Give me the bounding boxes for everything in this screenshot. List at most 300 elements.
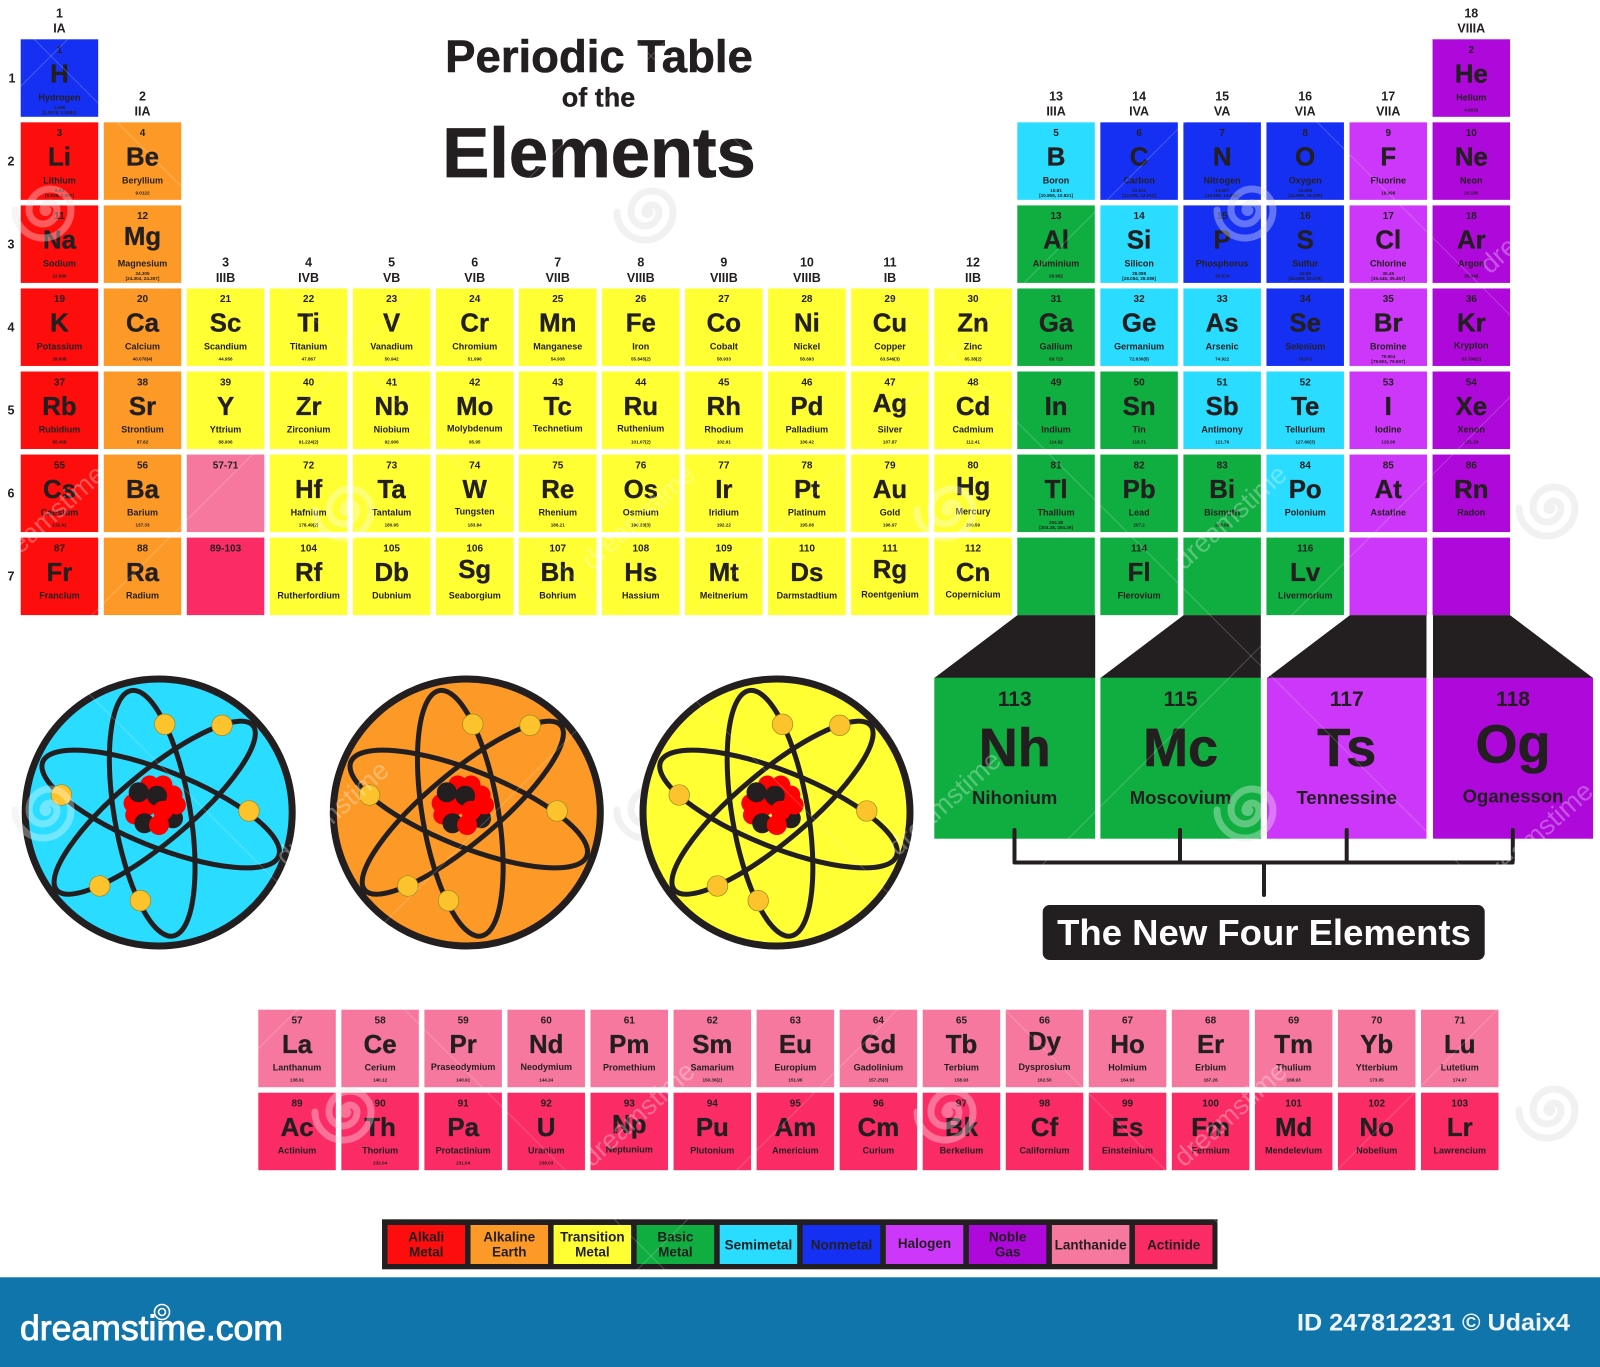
- cell: Md: Mendelevium: [1265, 1146, 1322, 1156]
- cell: Mg: 12: [137, 211, 148, 222]
- cell: Sb: Antimony: [1201, 424, 1243, 434]
- group labels: 9: [720, 256, 727, 270]
- cell: Ds: Darmstadtium: [777, 591, 837, 601]
- cell: He: He: [1455, 61, 1488, 89]
- cell: Rf: Rf: [295, 559, 323, 587]
- cell: Ce: Cerium: [365, 1063, 396, 1073]
- cell: Sg: Sg: [458, 556, 491, 584]
- cell: Ni: 58.693: [800, 356, 814, 361]
- cell: He: Helium: [1456, 92, 1486, 102]
- cell: Al: [1017, 205, 1095, 283]
- cell: Hf: Hafnium: [291, 508, 327, 518]
- cell: Eu: [757, 1010, 834, 1087]
- cell: As: As: [1206, 310, 1239, 338]
- cell: Lr: [1421, 1093, 1498, 1170]
- cell: Ta: 180.95: [385, 523, 399, 528]
- cell: Bh: Bh: [541, 559, 575, 587]
- callout: The New Four Elements: The New Four Elements: [1057, 912, 1471, 953]
- cell: I: [1350, 372, 1427, 449]
- cell: Si: Silicon: [1124, 258, 1154, 268]
- group labels: VIIA: [1376, 105, 1400, 119]
- cell: Fm: 100: [1202, 1098, 1219, 1109]
- cell: Se: Selenium: [1285, 341, 1325, 351]
- cell: Rg: [851, 538, 929, 615]
- cell: La: 57: [291, 1016, 303, 1027]
- cell: Os: Os: [624, 476, 658, 504]
- cell: Au: Au: [873, 476, 907, 504]
- cell: Sn: [1100, 372, 1178, 449]
- cell: Ar: 18: [1466, 211, 1477, 222]
- cell: Bi: [1183, 455, 1261, 532]
- cell: Lu: [1421, 1010, 1498, 1087]
- cell: Rh: Rh: [707, 393, 741, 421]
- cell: Pu: 94: [707, 1098, 718, 1109]
- cell: At: Astatine: [1370, 508, 1406, 518]
- legend: Basic Metal: [637, 1225, 714, 1264]
- cell: Mg: Magnesium: [118, 258, 167, 268]
- cell: Zn: 65.38(2): [964, 356, 982, 361]
- cell: Fe: 55.845(2): [631, 356, 651, 361]
- cell: Fe: 26: [635, 294, 647, 305]
- legend: Lanthanide: Lanthanide: [1055, 1237, 1127, 1252]
- cell: Os: 190.23(3): [631, 523, 651, 528]
- group labels: IB: [884, 271, 896, 285]
- cell: Pt: 195.08: [800, 523, 814, 528]
- cell: La: 138.91: [290, 1078, 305, 1083]
- cell: Yb: [1338, 1010, 1415, 1087]
- cell: Fm: [1172, 1093, 1249, 1170]
- cell: Sb: 51: [1217, 377, 1228, 388]
- cell: No: 102: [1368, 1098, 1385, 1109]
- cell: Mn: Mn: [539, 310, 576, 338]
- cell: Lu: 174.97: [1453, 1078, 1467, 1083]
- cell: Pm: Promethium: [603, 1063, 656, 1073]
- cell: Se: 78.971: [1298, 356, 1313, 361]
- cell: Md: 101: [1285, 1098, 1302, 1109]
- cell: Pu: [674, 1093, 751, 1170]
- cell: Ru: Ru: [624, 393, 658, 421]
- cell: Si: [1100, 205, 1178, 283]
- cell: Bk: Berkelium: [940, 1146, 983, 1156]
- cell: Lv: [1266, 538, 1344, 615]
- cell: lanthanide placeholder: 57-71: [213, 460, 239, 471]
- cell: N: 14.007: [1215, 188, 1230, 193]
- cell: Cl: [1350, 205, 1427, 283]
- cell: Rh: 45: [718, 377, 730, 388]
- cell: Db: [353, 538, 430, 615]
- cell: Sr: 38: [137, 377, 148, 388]
- cell: Cr: [436, 288, 513, 366]
- group labels: 5: [388, 256, 395, 270]
- cell: Cu: [851, 288, 929, 366]
- cell: Pm: Pm: [609, 1031, 649, 1059]
- cell: N: [14.006, 14.008]: [1205, 193, 1239, 198]
- periodic table main grid: [21, 39, 1510, 615]
- cell: Mo: 42: [469, 377, 481, 388]
- cell: Si: [28.084, 28.086]: [1122, 276, 1156, 281]
- group labels: IIB: [965, 271, 981, 285]
- cell: Cf: 98: [1039, 1098, 1050, 1109]
- cell: Am: 95: [790, 1098, 801, 1109]
- cell: Rh: [685, 372, 763, 449]
- cell: At: [1350, 455, 1427, 532]
- cell: Sb: 121.76: [1215, 440, 1230, 444]
- group labels: IVA: [1129, 105, 1149, 119]
- cell: Ce: 58: [375, 1016, 386, 1027]
- cell: N: Nitrogen: [1204, 175, 1241, 185]
- cell: Tb: Tb: [946, 1031, 977, 1059]
- cell: O: [1266, 122, 1344, 200]
- group labels: VB: [383, 271, 400, 285]
- cell: Hf: [270, 455, 347, 532]
- cell: Sm: 150.36(2): [702, 1078, 723, 1083]
- cell: Fr: Francium: [39, 591, 80, 601]
- period labels: 3: [8, 238, 15, 252]
- cell: Cl: Chlorine: [1370, 258, 1407, 268]
- cell: Cs: 132.91: [52, 523, 67, 528]
- cell: He: 4.0026: [1464, 107, 1479, 112]
- cell: Mt: 109: [716, 543, 733, 554]
- cell: B: B: [1047, 144, 1065, 172]
- cell: Nd: [507, 1010, 585, 1087]
- cell: Rh: Rhodium: [704, 424, 743, 434]
- cell: Co: Cobalt: [710, 341, 738, 351]
- period labels: 7: [8, 570, 15, 584]
- panel: new element 117 Tennessine: Tennessine: [1296, 787, 1397, 808]
- cell: C: C: [1130, 144, 1148, 172]
- cell: Ta: Ta: [378, 476, 406, 504]
- cell: B: 5: [1053, 128, 1059, 139]
- cell: Bi: 208.98: [1215, 523, 1230, 528]
- cell: Sm: Samarium: [691, 1063, 734, 1073]
- cell: C: 6: [1136, 128, 1142, 139]
- cell: S: S: [1297, 227, 1314, 255]
- cell: Pm: [590, 1010, 668, 1087]
- cell: Nd: 144.24: [539, 1078, 554, 1083]
- cell: Sn: 118.71: [1132, 440, 1146, 444]
- cell: Cn: Copernicium: [945, 590, 1001, 600]
- watermark diagonals and wordmarks: dreamstime: [1168, 459, 1293, 575]
- cell: Xe: Xenon: [1458, 424, 1485, 434]
- cell: Co: 58.933: [717, 356, 731, 361]
- cell: Mt: Mt: [709, 559, 739, 587]
- cell: Mt: [685, 538, 763, 615]
- panel: new element 113 Nihonium: Nihonium: [972, 787, 1057, 808]
- cell: Be: [104, 122, 181, 200]
- cell: Na: [21, 205, 98, 283]
- panel: new element 113 Nihonium: 113: [998, 688, 1032, 711]
- cell: Sn: Tin: [1132, 424, 1146, 434]
- cell: Pb: Lead: [1129, 508, 1150, 518]
- title: Periodic Table: [445, 31, 753, 82]
- cell: Np: [590, 1093, 668, 1170]
- cell: Hf: 72: [303, 460, 315, 471]
- cell: Ba: 137.33: [135, 523, 150, 528]
- cell: Ge: 32: [1134, 294, 1145, 305]
- cell: Br: Bromine: [1370, 341, 1407, 351]
- cell: Pd: 106.42: [800, 440, 814, 444]
- callout: The New Four Elements: [1043, 905, 1485, 960]
- cell: Li: Lithium: [43, 175, 76, 185]
- cell: H: [21, 39, 98, 117]
- group labels: VIA: [1295, 105, 1316, 119]
- group labels: VIIIB: [710, 271, 738, 285]
- cell: Bk: 97: [956, 1098, 967, 1109]
- cell: N: N: [1213, 144, 1231, 172]
- cell: Np: 93: [624, 1098, 635, 1109]
- cell: Pu: Pu: [696, 1114, 729, 1142]
- cell: Mn: [519, 288, 596, 366]
- cell: U: 238.03: [539, 1161, 554, 1166]
- cell: Si: 28.085: [1132, 271, 1147, 276]
- cell: Cd: Cadmium: [952, 424, 994, 434]
- cell: Ru: 44: [635, 377, 647, 388]
- cell: B: [10.806, 10.821]: [1039, 193, 1073, 198]
- cell: Ac: Actinium: [278, 1146, 316, 1156]
- cell: actinide placeholder: [187, 538, 264, 615]
- cell: Eu: 151.96: [788, 1078, 803, 1083]
- cell: Cm: Cm: [858, 1114, 899, 1142]
- cell: Tb: 65: [956, 1016, 967, 1027]
- cell: V: Vanadium: [370, 341, 413, 351]
- cell: Pr: 59: [458, 1016, 469, 1027]
- cell: Al: 13: [1050, 211, 1062, 222]
- cell: Cr: 51.996: [468, 356, 482, 361]
- cell: Dy: 162.50: [1037, 1078, 1052, 1083]
- group labels: 15: [1215, 90, 1229, 104]
- cell: blank 118: [1433, 538, 1510, 615]
- cell: B: Boron: [1043, 175, 1069, 185]
- cell: Ce: 140.12: [373, 1078, 388, 1083]
- cell: Cl: 35.45: [1382, 271, 1394, 276]
- cell: Ta: 73: [386, 460, 398, 471]
- cell: W: 74: [469, 460, 481, 471]
- cell: Ir: 77: [718, 460, 730, 471]
- cell: In: In: [1045, 393, 1068, 421]
- cell: Gd: 157.25(3): [869, 1078, 889, 1083]
- cell: Cm: 96: [873, 1098, 884, 1109]
- cell: Th: [341, 1093, 419, 1170]
- cell: Ir: Ir: [715, 476, 732, 504]
- cell: Th: 90: [375, 1098, 386, 1109]
- cell: Rb: 85.468: [52, 440, 67, 444]
- legend: Transition Metal: Metal: [575, 1245, 610, 1260]
- cell: Eu: 63: [790, 1016, 801, 1027]
- cell: Gd: Gadolinium: [854, 1063, 903, 1073]
- cell: Ru: Ruthenium: [617, 424, 664, 434]
- cell: V: [353, 288, 430, 366]
- panel: new element 118 Oganesson: Oganesson: [1463, 786, 1563, 807]
- cell: Pm: 61: [624, 1016, 635, 1027]
- cell: Cd: 48: [967, 377, 979, 388]
- cell: Hg: Mercury: [955, 507, 991, 517]
- legend: Alkaline Earth: Alkaline: [483, 1230, 536, 1245]
- legend: Halogen: [886, 1225, 963, 1264]
- legend: Nonmetal: [803, 1225, 880, 1264]
- cell: Tm: 69: [1288, 1016, 1300, 1027]
- cell: Hs: 108: [632, 543, 650, 554]
- cell: Pd: Pd: [790, 393, 823, 421]
- cell: I: I: [1385, 393, 1392, 421]
- group labels: 7: [554, 256, 561, 270]
- watermark diagonals and wordmarks: dreamstime: [1168, 1056, 1293, 1172]
- cell: Mn: 54.938: [551, 356, 565, 361]
- cell: Re: Rhenium: [538, 508, 577, 518]
- group labels: 12: [966, 256, 980, 270]
- cell: Cr: Cr: [460, 310, 489, 338]
- panel: new element 115 Moscovium: 115: [1164, 688, 1198, 711]
- cell: Po: Po: [1289, 476, 1322, 504]
- cell: Sm: 62: [707, 1016, 718, 1027]
- cell: Nd: Neodymium: [520, 1062, 572, 1072]
- cell: Db: 105: [383, 543, 400, 554]
- cell: Pa: [424, 1093, 502, 1170]
- panel: new element 118 Oganesson: Og: [1476, 715, 1550, 775]
- cell: Ga: Gallium: [1040, 341, 1073, 351]
- cell: La: La: [282, 1031, 313, 1059]
- cell: Sr: 87.62: [137, 440, 149, 444]
- cell: Xe: 54: [1466, 377, 1477, 388]
- group labels: VA: [1214, 105, 1230, 119]
- group labels: VIIIB: [793, 271, 821, 285]
- cell: He: [1433, 39, 1510, 117]
- cell: Cl: [35.446, 35.457]: [1371, 276, 1406, 281]
- cell: At: At: [1375, 476, 1402, 504]
- cell: Dy: 66: [1039, 1016, 1050, 1027]
- cell: Nd: Nd: [529, 1031, 563, 1059]
- cell: K: K: [50, 310, 69, 338]
- cell: Ge: Ge: [1122, 310, 1156, 338]
- cell: Gd: 64: [873, 1016, 884, 1027]
- cell: W: W: [463, 476, 488, 504]
- cell: Br: 79.904: [1381, 354, 1396, 359]
- cell: U: [507, 1093, 585, 1170]
- cell: Pr: Pr: [450, 1031, 477, 1059]
- cell: Hf: 178.49(2): [299, 523, 319, 528]
- cell: Zn: 30: [967, 294, 979, 305]
- cell: Er: 167.26: [1204, 1078, 1218, 1083]
- cell: Ra: Radium: [126, 591, 159, 601]
- legend: Alkali Metal: [388, 1225, 465, 1264]
- cell: Kr: Krypton: [1454, 340, 1489, 350]
- group labels: IIIA: [1046, 105, 1066, 119]
- cell: blank 115: [1183, 538, 1261, 615]
- cell: Cs: 55: [54, 460, 65, 471]
- cell: Gd: Gd: [860, 1031, 896, 1059]
- cell: Re: 186.21: [551, 523, 565, 528]
- cell: Be: Be: [126, 144, 159, 172]
- cell: O: 8: [1302, 128, 1308, 139]
- group labels: 2: [139, 90, 146, 104]
- period labels: 6: [8, 486, 15, 500]
- cell: Am: Am: [775, 1114, 816, 1142]
- cell: Sr: [104, 372, 181, 449]
- cell: Na: Sodium: [43, 258, 76, 268]
- cell: F: 18.998: [1381, 190, 1396, 195]
- panel: new element 115 Moscovium: [1100, 615, 1261, 839]
- cell: Cf: Californium: [1019, 1146, 1070, 1156]
- period labels: 2: [8, 154, 15, 168]
- cell: Rb: 37: [54, 377, 65, 388]
- cell: Tl: 204.38: [1049, 520, 1064, 525]
- legend: Transition Metal: Transition: [560, 1230, 625, 1245]
- cell: Np: Np: [612, 1111, 646, 1139]
- cell: Na: 11: [54, 211, 65, 222]
- cell: Fl: Flerovium: [1118, 591, 1161, 601]
- group labels: 18: [1464, 6, 1478, 20]
- cell: K: [21, 288, 98, 366]
- cell: Ra: [104, 538, 181, 615]
- cell: Ga: Ga: [1039, 310, 1074, 338]
- cell: Ti: 22: [303, 294, 315, 305]
- cell: Xe: [1433, 372, 1510, 449]
- cell: Ag: Silver: [878, 424, 903, 434]
- cell: Cn: Cn: [956, 559, 990, 587]
- cell: Cm: [840, 1093, 917, 1170]
- cell: Dy: Dysprosium: [1018, 1062, 1071, 1072]
- cell: blank 117: [1350, 538, 1427, 615]
- cell: Er: [1172, 1010, 1249, 1087]
- cell: Cr: Chromium: [452, 341, 497, 351]
- cell: Cu: 29: [884, 294, 896, 305]
- cell: Ag: Ag: [873, 390, 907, 418]
- cell: Rb: Rubidium: [39, 424, 80, 434]
- cell: Rf: Rutherfordium: [277, 591, 340, 601]
- cell: S: [1266, 205, 1344, 283]
- cell: Bi: 83: [1217, 460, 1228, 471]
- watermark spirals on background: [15, 189, 1575, 1140]
- cell: Th: Th: [364, 1114, 396, 1142]
- cell: Ba: 56: [137, 460, 148, 471]
- cell: Tc: Technetium: [533, 424, 583, 434]
- cell: Zn: [934, 288, 1012, 366]
- cell: Ce: [341, 1010, 419, 1087]
- cell: Re: 75: [552, 460, 564, 471]
- cell: Lv: 116: [1297, 543, 1314, 554]
- panel: new element 118 Oganesson: [1433, 615, 1593, 839]
- cell: Ds: [768, 538, 846, 615]
- watermark diagonals and wordmarks: dreamstime: [1474, 163, 1599, 279]
- legend: Alkali Metal: Metal: [409, 1245, 444, 1260]
- cell: U: Uranium: [528, 1146, 564, 1156]
- cell: Sn: Sn: [1123, 393, 1156, 421]
- cell: Lu: Lu: [1444, 1031, 1476, 1059]
- cell: Mg: Mg: [124, 223, 161, 251]
- cell: No: [1338, 1093, 1415, 1170]
- cell: Ru: [602, 372, 680, 449]
- cell: actinide placeholder: 89-103: [210, 543, 242, 554]
- cell: O: [15.999, 16.000]: [1288, 193, 1323, 198]
- cell: Te: Te: [1291, 393, 1319, 421]
- cell: Sm: Sm: [692, 1031, 732, 1059]
- cell: Dy: Dy: [1028, 1028, 1062, 1056]
- cell: Cd: 112.41: [966, 440, 980, 444]
- cell: Rh: 102.91: [717, 440, 731, 444]
- cell: Ne: [1433, 122, 1510, 200]
- cell: Pr: 140.91: [456, 1078, 471, 1083]
- cell: Po: 84: [1300, 460, 1311, 471]
- cell: Es: Einsteinium: [1102, 1146, 1153, 1156]
- cell: Ra: Ra: [126, 559, 160, 587]
- watermark diagonals and wordmarks: dreamstime: [1474, 776, 1599, 892]
- cell: Te: [1266, 372, 1344, 449]
- cell: Tm: 168.93: [1287, 1078, 1301, 1083]
- cell: Si: 14: [1134, 211, 1145, 222]
- cell: H: Hydrogen: [38, 92, 80, 102]
- cell: Ne: Neon: [1460, 175, 1483, 185]
- cell: Tl: [1017, 455, 1095, 532]
- cell: He: 2: [1469, 45, 1475, 56]
